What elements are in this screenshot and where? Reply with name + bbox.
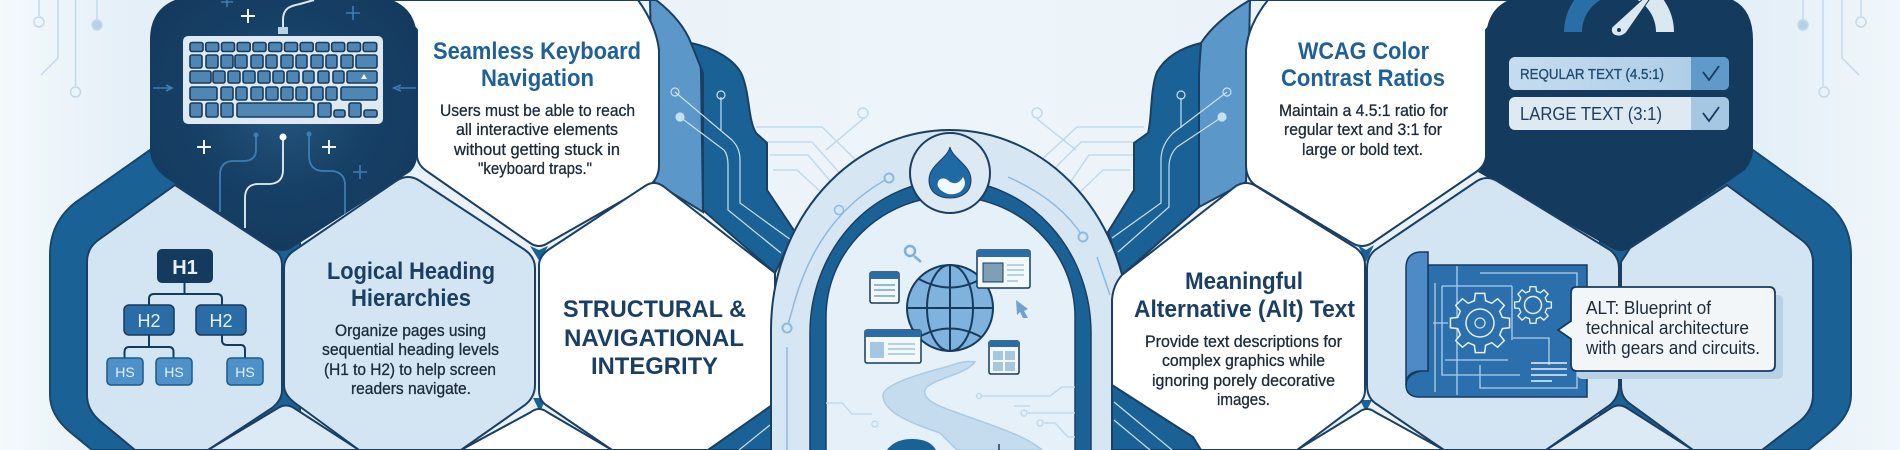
lower-left light hex [208, 406, 359, 450]
icon: contrast gauge [1564, 0, 1674, 36]
lower white hex right [1297, 409, 1444, 450]
icon: blueprint [1406, 252, 1587, 397]
badge: regular text [1509, 57, 1729, 90]
text: keyboard navigation body: without getting stuck in [453, 141, 620, 159]
heading: WCAG contrast: WCAG Color [1298, 38, 1429, 65]
text: alt text body: images. [1217, 391, 1270, 409]
heading: logical heading: Hierarchies [351, 285, 471, 312]
callout: alt text: with gears and circuits. [1585, 338, 1760, 358]
icon: browser window lower left [865, 330, 921, 363]
text: alt text body [1145, 333, 1342, 409]
icon: browser window top right [977, 250, 1030, 288]
text: keyboard navigation body: Users must be able to reach [440, 102, 635, 120]
inner faint circuits [826, 387, 1075, 437]
text: alt text body: Provide text descriptions for [1145, 333, 1342, 351]
text: alt text body: complex graphics while [1162, 352, 1325, 370]
text: keyboard navigation body: "keyboard traps." [478, 160, 592, 178]
arch gateway [771, 130, 1129, 450]
icon: heading tree: H2 [137, 311, 161, 331]
icon: heading tree: H2 [209, 311, 233, 331]
right outer band [1600, 150, 1851, 450]
icon: keyboard [183, 36, 383, 124]
title: INTEGRITY [591, 353, 718, 380]
badge: large text [1509, 97, 1729, 130]
heading: alt text: Meaningful [1185, 268, 1303, 295]
junction triangles [530, 245, 1374, 412]
callout: alt text [1558, 287, 1783, 379]
heading: WCAG contrast [1281, 38, 1445, 92]
right light hex [1621, 185, 1813, 450]
heading: logical heading: Logical Heading [327, 258, 495, 285]
heading: keyboard navigation: Navigation [481, 65, 594, 92]
text: WCAG contrast body: large or bold text. [1302, 141, 1423, 159]
text: logical heading body: (H1 to H2) to help screen [324, 361, 496, 379]
text: logical heading body: Organize pages using [335, 322, 486, 340]
right connector strand [1108, 0, 1268, 275]
winding path [883, 361, 1042, 450]
left outer band [50, 150, 300, 450]
lower right light hex [1546, 406, 1693, 450]
panel: WCAG contrast text hex [1246, 0, 1510, 246]
panel: logical heading hex [284, 177, 535, 450]
panel: alt text hex [1112, 183, 1365, 450]
icon: magnifier [905, 246, 921, 262]
left connector strand [638, 0, 795, 450]
icon: heading tree: HS [164, 364, 184, 380]
icon: heading tree: HS [115, 364, 135, 380]
icon: keyboard cable [278, 0, 314, 34]
text: logical heading body [322, 322, 499, 398]
text: WCAG contrast body: regular text and 3:1 for [1284, 121, 1442, 139]
icon: heading tree [107, 249, 263, 385]
title: NAVIGATIONAL [564, 325, 744, 352]
callout: alt text: ALT: Blueprint of [1586, 298, 1712, 318]
text: logical heading body: sequential heading levels [322, 341, 499, 359]
panel: blueprint hex [1367, 178, 1783, 450]
badge: large text: LARGE TEXT (3:1) [1520, 104, 1662, 124]
icon: browser window lower right [989, 341, 1019, 374]
text: logical heading body: readers navigate. [351, 380, 471, 398]
icon: cursor [1016, 300, 1028, 318]
title: STRUCTURAL & [563, 296, 746, 323]
medallion with drop [910, 133, 990, 213]
callout: alt text: technical architecture [1586, 318, 1749, 338]
panel: structural title hex [539, 183, 775, 450]
title [563, 296, 746, 380]
heading: alt text [1134, 268, 1355, 323]
heading: keyboard navigation [433, 38, 641, 92]
right lower connector strand [1112, 385, 1201, 450]
icon: heading tree: H1 [172, 257, 198, 279]
panel: dark contrast hex [1478, 0, 1753, 251]
text: keyboard navigation body: all interactive elements [456, 121, 618, 139]
dark figure at base [887, 439, 936, 450]
lower white hex left [461, 409, 612, 450]
badge: regular text: REQULAR TEXT (4.5:1) [1520, 66, 1664, 83]
text: alt text body: ignoring porely decorative [1152, 372, 1335, 390]
text: WCAG contrast body: Maintain a 4.5:1 ratio for [1279, 102, 1448, 120]
icon: plus marks and arrows [153, 0, 416, 179]
icon: browser window left [870, 272, 899, 303]
text: WCAG contrast body [1279, 102, 1448, 159]
heading: keyboard navigation: Seamless Keyboard [433, 38, 641, 65]
icon: heading tree: HS [235, 364, 255, 380]
icon: globe [907, 265, 993, 351]
panel: dark keyboard hex [150, 0, 417, 251]
panel: heading hierarchy icon hex [87, 185, 282, 450]
circuit lines below keyboard [220, 132, 345, 228]
heading: alt text: Alternative (Alt) Text [1134, 296, 1355, 323]
text: keyboard navigation body [440, 102, 635, 178]
heading: WCAG contrast: Contrast Ratios [1281, 65, 1445, 92]
panel: keyboard navigation text hex [392, 0, 659, 246]
heading: logical heading [327, 258, 495, 312]
